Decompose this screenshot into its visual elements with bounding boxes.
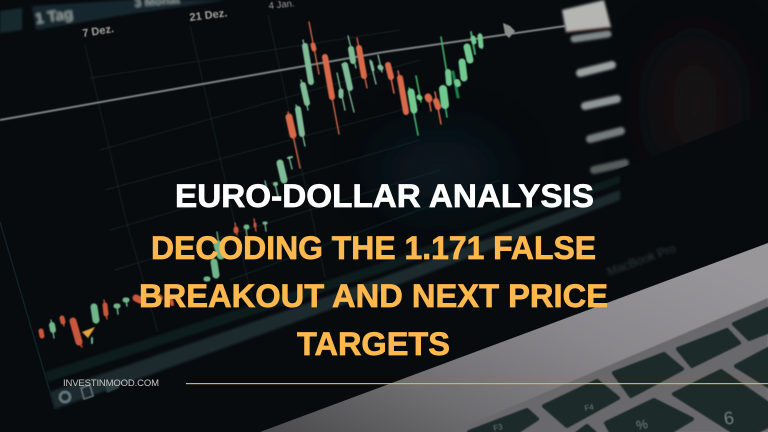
subtitle: BREAKOUT AND NEXT PRICE (139, 278, 608, 314)
subtitle: TARGETS (297, 326, 450, 362)
title: EURO-DOLLAR ANALYSIS (175, 178, 594, 214)
website credit: INVESTINMOOD.COM (63, 378, 159, 389)
candlestick chart: main rally (265, 22, 482, 196)
orange triangle marker (82, 327, 95, 338)
MacBook Pro bezel label: MacBook Pro (605, 241, 678, 279)
top toolbar with timeframes and dates (0, 0, 228, 33)
bottom status icons right (630, 152, 768, 216)
subtitle: DECODING THE 1.171 FALSE (151, 230, 596, 266)
footer rule (186, 383, 768, 384)
chart grid (85, 15, 500, 340)
subtitle (139, 230, 608, 362)
top toolbar with timeframes and dates: 1 Tag (34, 5, 74, 28)
screen toolbar icons (60, 380, 119, 402)
keyboard keys (469, 308, 768, 432)
horizontal price line (0, 23, 565, 120)
date axis labels: 21 Dez. (189, 7, 228, 24)
date axis labels (82, 0, 295, 40)
key legends: 6 (722, 408, 736, 429)
key legends: F4 (584, 402, 595, 413)
price axis labels (562, 0, 629, 200)
candlestick chart: lower left series (41, 219, 266, 347)
laptop body (260, 243, 768, 432)
key legends (493, 402, 736, 432)
date axis labels: 7 Dez. (82, 23, 115, 40)
laptop screen frame (0, 112, 768, 432)
